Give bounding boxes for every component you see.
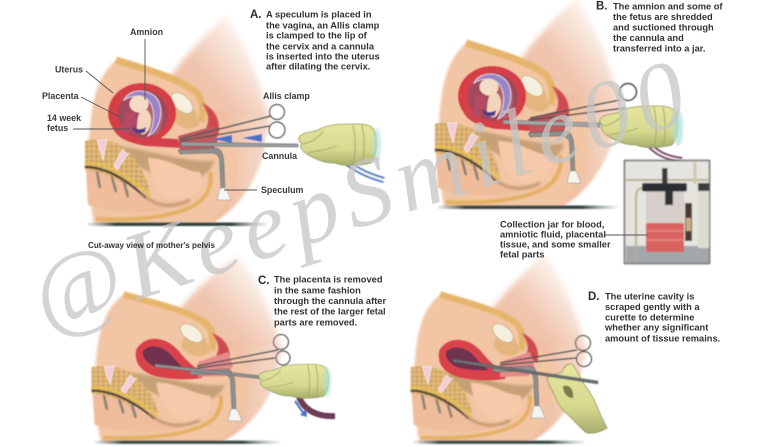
watermark: @KeepSmile00 bbox=[18, 38, 698, 350]
empty uterus D bbox=[439, 340, 507, 380]
caption jar bbox=[500, 220, 611, 260]
tube B bbox=[648, 143, 682, 160]
caption D bbox=[588, 291, 720, 344]
caption jar: fetal parts bbox=[500, 250, 544, 260]
panel C: cut-away illustration bbox=[92, 255, 335, 444]
speculum D bbox=[492, 366, 545, 418]
gloved hand B bbox=[600, 106, 677, 148]
caption A: after dilating the cervix. bbox=[266, 62, 370, 72]
labels A: fetus bbox=[47, 123, 68, 133]
caption A: the cervix and a cannula bbox=[266, 42, 375, 52]
caption jar: tissue, and some smaller bbox=[500, 240, 611, 250]
caption D: D. bbox=[588, 291, 600, 303]
caption jar: amniotic fluid, placental bbox=[500, 230, 606, 240]
arrow C bbox=[295, 401, 304, 414]
canal C bbox=[198, 352, 233, 377]
caption B: the cannula and bbox=[613, 33, 684, 43]
instruments C bbox=[197, 334, 290, 368]
caption C: the rest of the larger fetal bbox=[274, 306, 386, 316]
panel A: cut-away illustration bbox=[85, 16, 384, 226]
labels A: Speculum bbox=[261, 185, 304, 195]
panel B: cut-away illustration bbox=[435, 0, 683, 209]
caption D: scraped gently with a bbox=[605, 302, 700, 312]
caption C: C. bbox=[258, 275, 270, 287]
speculum bbox=[178, 148, 231, 200]
caption C: in the same fashion bbox=[274, 286, 361, 296]
caption A bbox=[250, 9, 380, 72]
labels A: Placenta bbox=[42, 91, 79, 101]
caption B: The amnion and some of bbox=[613, 2, 723, 12]
caption C bbox=[258, 274, 386, 328]
labels A bbox=[42, 27, 310, 195]
cannula bbox=[181, 142, 298, 147]
caption jar: Collection jar for blood, bbox=[500, 220, 604, 230]
caption A: is clamped to the lip of bbox=[266, 30, 368, 40]
caption D: The uterine cavity is bbox=[605, 292, 694, 302]
caption D: whether any significant bbox=[604, 322, 708, 332]
gloved hand bbox=[299, 124, 376, 166]
text blocks bbox=[42, 0, 723, 344]
caption B: and suctioned through bbox=[613, 22, 714, 32]
caption A: A. bbox=[250, 9, 262, 21]
panel D: cut-away illustration bbox=[411, 255, 607, 444]
labels A: Cannula bbox=[262, 151, 297, 161]
caption B: transferred into a jar. bbox=[613, 44, 705, 54]
clamp D bbox=[500, 336, 592, 366]
leader lines A bbox=[73, 39, 257, 190]
caption C: parts are removed. bbox=[274, 318, 357, 328]
speculum C bbox=[189, 369, 242, 421]
labels A: Uterus bbox=[55, 64, 83, 74]
tube C bbox=[299, 397, 335, 416]
labels A: 14 week bbox=[47, 113, 81, 123]
caption D: curette to determine bbox=[605, 312, 694, 322]
footnote: Cut-away view of mother's pelvis bbox=[88, 241, 215, 250]
caption B bbox=[596, 0, 723, 54]
caption A: is inserted into the uterus bbox=[266, 52, 380, 62]
caption C: The placenta is removed bbox=[274, 274, 383, 284]
caption D: amount of tissue remains. bbox=[605, 334, 720, 344]
caption C: through the cannula after bbox=[274, 296, 386, 306]
empty uterus C bbox=[136, 339, 204, 380]
caption A: the vagina, an Allis clamp bbox=[266, 20, 380, 30]
photo: collection jar bbox=[624, 160, 710, 264]
labels A: Amnion bbox=[130, 27, 163, 37]
labels A: Allis clamp bbox=[263, 91, 310, 101]
caption A: A speculum is placed in bbox=[266, 10, 372, 20]
gloved hand D bbox=[547, 364, 607, 433]
allis clamp bbox=[180, 104, 285, 141]
suction arrows bbox=[212, 134, 262, 143]
instruments B bbox=[530, 84, 636, 120]
curette D bbox=[453, 359, 598, 384]
gloved hand C bbox=[259, 364, 329, 398]
vaginal canal bbox=[178, 126, 218, 152]
leader line: jar bbox=[604, 234, 648, 236]
caption B: the fetus are shredded bbox=[613, 12, 713, 22]
canal D bbox=[500, 352, 535, 377]
caption B: B. bbox=[596, 0, 608, 12]
uterus with fetus bbox=[108, 83, 180, 148]
tube bbox=[347, 163, 384, 180]
